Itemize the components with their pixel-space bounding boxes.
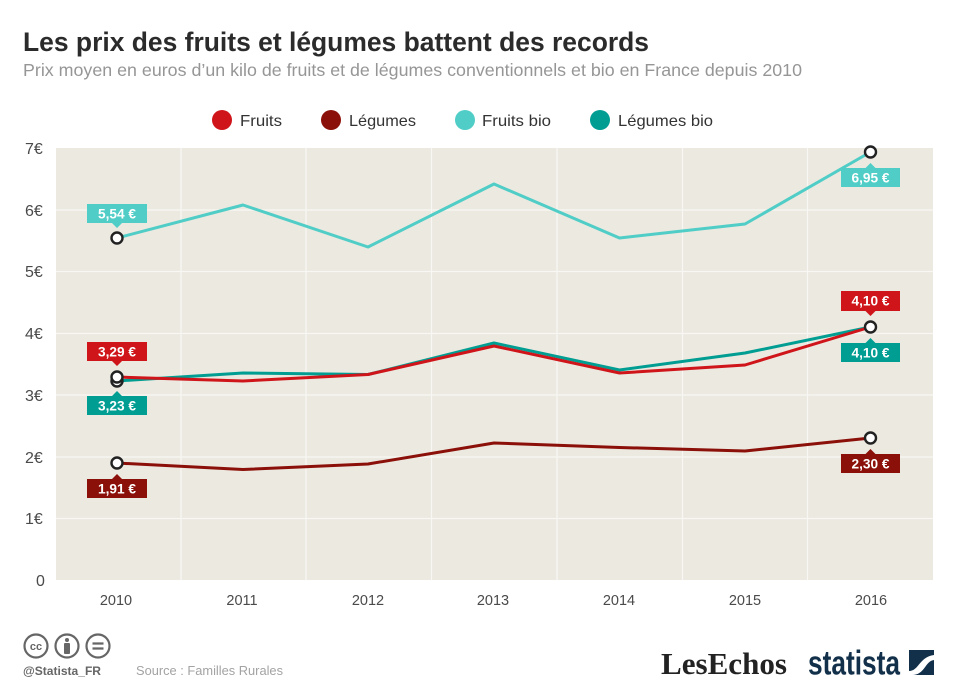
callout: 6,95 €: 6,95 € (852, 170, 890, 186)
licence icons (24, 634, 110, 658)
callout: 3,23 €: 3,23 € (98, 398, 136, 414)
x axis labels: 2015 (729, 593, 761, 609)
x axis labels (100, 593, 887, 609)
x axis labels: 2011 (226, 593, 258, 609)
x axis labels: 2014 (603, 593, 635, 609)
callout: 1,91 €: 1,91 € (98, 482, 136, 496)
line: Fruits (117, 327, 870, 381)
y axis labels: 2€ (25, 450, 43, 467)
y axis labels: 7€ (25, 141, 43, 158)
legend item: Légumes bio (590, 110, 713, 130)
callout: 2,30 €: 2,30 € (852, 456, 890, 472)
x axis labels: 2012 (352, 593, 384, 609)
logo: statista: statista (808, 644, 901, 682)
legend item: Légumes bio: Légumes bio (618, 113, 713, 130)
callout: 5,54 €: 5,54 € (98, 206, 136, 222)
callout: 4,10 € légumes bio: 4,10 € (852, 346, 890, 360)
icon: creative commons: cc (30, 641, 42, 653)
plot background (56, 148, 933, 580)
x axis labels: 2010 (100, 593, 132, 609)
legend item: Légumes: Légumes (349, 113, 416, 130)
icon: statista mark (909, 650, 934, 675)
callout: 3,29 €: 3,29 € (98, 344, 136, 360)
callout: 4,10 € légumes bio (841, 338, 900, 362)
line: Fruits bio (117, 152, 870, 247)
legend item: Fruits bio (455, 110, 551, 130)
callout: 1,91 € (87, 474, 147, 498)
logo: Les Echos: LesEchos (661, 646, 787, 681)
callout: 5,54 € (87, 204, 147, 228)
y axis labels (25, 141, 45, 590)
source: Source : Familles Rurales (136, 664, 283, 678)
y axis labels: 5€ (25, 264, 43, 281)
statista handle: @Statista_FR (23, 666, 102, 678)
icon: no derivatives (86, 634, 110, 658)
callout: 4,10 € fruits: 4,10 € (852, 294, 890, 308)
legend item: Fruits (212, 110, 282, 130)
callout: 2,30 € (841, 449, 900, 473)
callout: 6,95 € (841, 163, 900, 187)
y axis labels: 0 (36, 573, 45, 590)
y axis labels: 3€ (25, 388, 43, 405)
line chart (25, 141, 933, 609)
callout: 4,10 € fruits (841, 291, 900, 316)
legend item: Fruits: Fruits (240, 113, 282, 130)
callout: 3,29 € (87, 342, 147, 366)
legend (212, 110, 713, 130)
callout: 3,23 € (87, 391, 147, 415)
x axis labels: 2013 (477, 593, 509, 609)
y axis labels: 4€ (25, 326, 43, 343)
line: Légumes (117, 438, 870, 470)
data markers (112, 146, 876, 468)
icon: attribution (56, 634, 78, 658)
subtitle: Prix moyen en euros d’un kilo de fruits et de légumes conventionnels et bio en France depuis 2010 (23, 60, 802, 80)
x axis labels: 2016 (855, 593, 887, 609)
legend item: Légumes (321, 110, 416, 130)
legend item: Fruits bio: Fruits bio (482, 113, 551, 130)
line: Légumes bio (117, 327, 870, 381)
title: Les prix des fruits et légumes battent des records (23, 27, 649, 57)
y axis labels: 6€ (25, 203, 43, 220)
y axis labels: 1€ (25, 511, 43, 528)
